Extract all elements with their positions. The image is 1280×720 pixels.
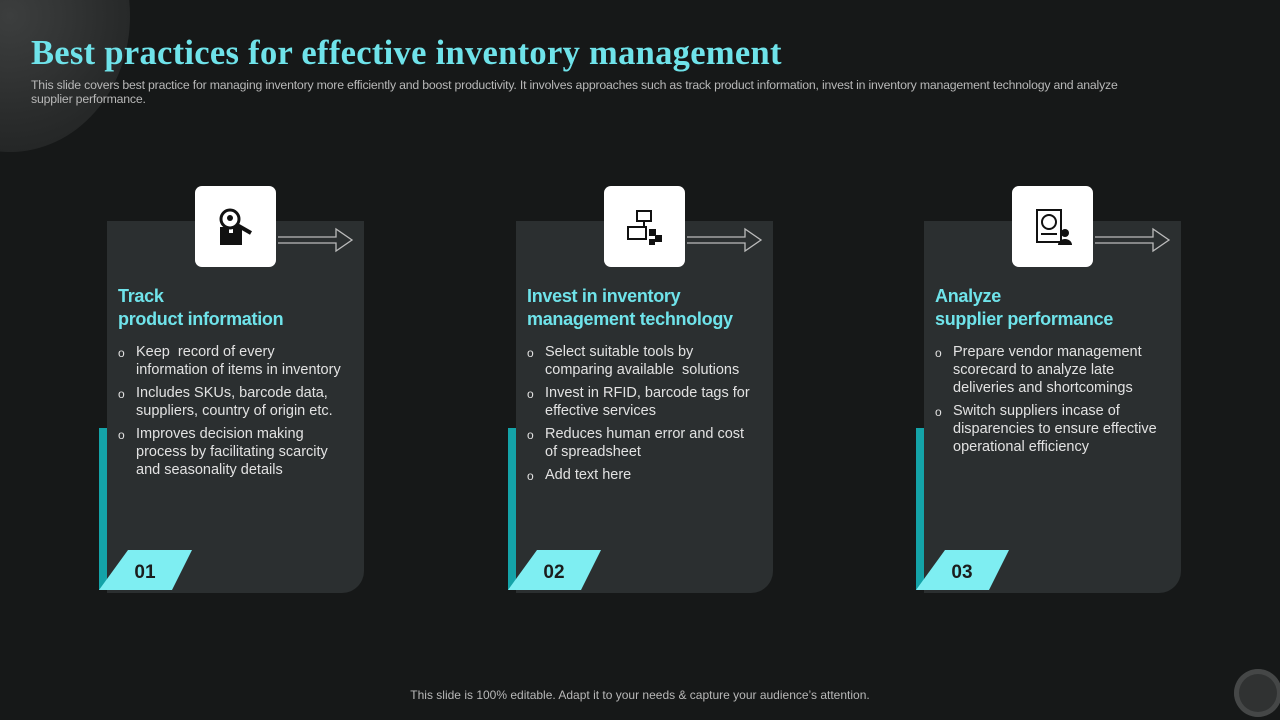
number tab 02 — [508, 550, 601, 590]
bullets: Prepare vendor management scorecard to analyze late deliveries and shortcomings — [953, 344, 1142, 396]
heading — [118, 286, 283, 329]
number tab 01: 01 — [134, 562, 156, 583]
panel: track product information — [107, 221, 364, 593]
arrow — [687, 228, 762, 252]
icon: supplier scorecard — [1012, 186, 1093, 267]
bullets: Reduces human error and cost of spreadsheet — [545, 426, 744, 460]
panel: invest in inventory management technology — [516, 221, 773, 593]
icon: technology network — [604, 186, 685, 267]
bullets: Keep record of every information of items in inventory — [136, 344, 341, 378]
panel: analyze supplier performance — [924, 221, 1181, 593]
bullets: Includes SKUs, barcode data, suppliers, country of origin etc. — [136, 385, 333, 419]
decorative circle bottom-right — [1234, 669, 1280, 717]
number tab 02: 02 — [543, 562, 565, 583]
arrow — [278, 228, 353, 252]
bullets — [528, 344, 750, 483]
heading: management technology — [527, 309, 733, 329]
arrow — [1095, 228, 1170, 252]
bullets: Switch suppliers incase of disparencies to ensure effective operational efficiency — [953, 403, 1157, 455]
heading: Analyze — [935, 286, 1001, 306]
bullets: Add text here — [545, 467, 631, 483]
bullets: Invest in RFID, barcode tags for effective services — [545, 385, 750, 419]
bullets — [118, 344, 341, 478]
heading: supplier performance — [935, 309, 1113, 329]
bullets — [936, 344, 1157, 455]
icon: location search box — [195, 186, 276, 267]
heading: product information — [118, 309, 283, 329]
heading — [935, 286, 1113, 329]
number tab 01 — [99, 550, 192, 590]
number tab 03: 03 — [951, 562, 973, 583]
bullets: Select suitable tools by comparing available solutions — [545, 344, 739, 378]
heading — [527, 286, 733, 329]
subtitle: This slide covers best practice for managing inventory more efficiently and boost productivity. It involves approaches such as track product information, invest in inventory management technology and analyze supplier performance. — [31, 78, 1118, 106]
bullets: Improves decision making process by facilitating scarcity and seasonality details — [136, 426, 328, 478]
title: Best practices for effective inventory management — [31, 34, 782, 72]
footer note: This slide is 100% editable. Adapt it to your needs & capture your audience’s attention. — [410, 688, 870, 702]
heading: Track — [118, 286, 164, 306]
heading: Invest in inventory — [527, 286, 680, 306]
decorative circles top-left — [0, 0, 130, 152]
number tab 03 — [916, 550, 1009, 590]
